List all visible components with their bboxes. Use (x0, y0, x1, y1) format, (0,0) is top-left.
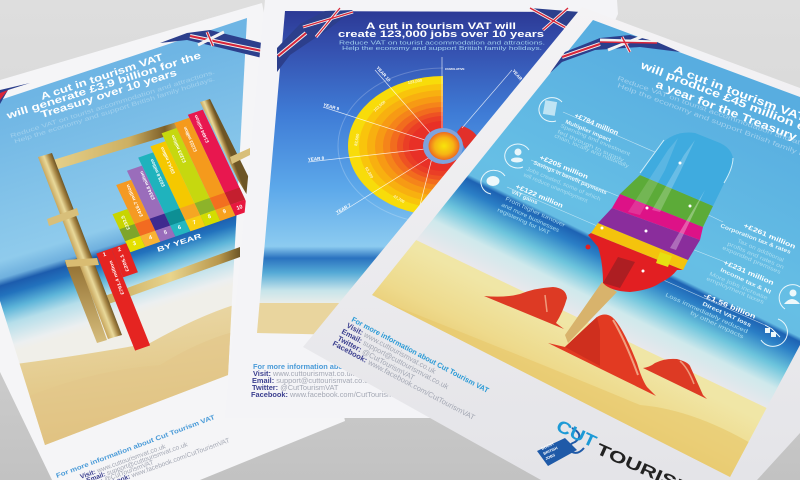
left statistics: and more businesses (500, 202, 560, 234)
middle leaflet title (338, 20, 546, 52)
bar chart: revenue by year: £1223 million (170, 134, 187, 164)
left statistics: Savings in benefit payments (532, 160, 607, 196)
left statistics: will reduce unemployment (521, 172, 589, 205)
wedge values: 47,700 (392, 194, 406, 204)
bar chart: revenue by year: 9 (222, 209, 227, 215)
right leaflet contact details: Visit: www.cuttourismvat.co.uk (345, 321, 438, 376)
bar chart: revenue by year: £232.5 (120, 214, 131, 231)
right leaflet contact details: Email: support@cuttourismvat.co.uk (340, 327, 451, 391)
bar chart: revenue by year: £1223 million (182, 126, 198, 153)
bar chart: revenue by year: 5 (163, 230, 168, 236)
bar chart: revenue by year (83, 110, 250, 351)
leader lines (507, 112, 765, 325)
left leaflet title: Help the economy and support British family holidays. (14, 76, 216, 145)
year labels: YEAR 1 (511, 68, 526, 84)
bar chart: revenue by year: 6 (177, 225, 182, 231)
bar chart: revenue by year: 10 (236, 204, 244, 212)
right statistics: expanded premises (721, 245, 782, 276)
left leaflet contact details: For more information about Cut Tourism VAT (55, 414, 216, 480)
middle leaflet contact details: Visit: www.cuttourismvat.co.uk (253, 369, 355, 378)
middle leaflet contact details: Email: support@cuttourismvat.co.uk (252, 376, 372, 385)
right leaflet contact details (331, 315, 491, 422)
wedge values (353, 77, 423, 204)
right statistics: More jobs increase (708, 271, 768, 302)
wedge values: 123,000 (407, 77, 423, 85)
bar chart: revenue by year: 3 (132, 241, 137, 247)
logo: Cut Tourism: JOBS (545, 453, 556, 461)
left leaflet title (4, 50, 216, 145)
year labels: YEAR 7 (335, 202, 352, 215)
left statistics: +£784 million (573, 112, 619, 137)
icon: piggy bank (481, 170, 505, 194)
right leaflet contact details: Facebook: www.facebook.com/CutTourismVAT (331, 339, 477, 422)
right statistics: Direct VAT loss (701, 301, 752, 329)
bar chart: revenue by year: £1404 million (193, 114, 210, 144)
middle leaflet title: Reduce VAT on tourist accommodation and attractions. (339, 40, 546, 46)
left leaflet contact details: Visit: www.cuttourismvat.co.uk (79, 443, 167, 480)
left statistics: Spending and investment (559, 123, 631, 158)
ice lolly melting (565, 132, 733, 343)
spokes (308, 57, 512, 215)
left leaflet title: Treasury over 10 years (40, 68, 179, 121)
logo: Cut Tourism: BRITISH (543, 446, 559, 456)
year labels: YEAR 9 (323, 102, 340, 112)
left leaflet beach picture (0, 18, 247, 445)
icon: person (779, 285, 800, 309)
left statistics: From higher turnover (504, 196, 566, 229)
left statistics: registering for VAT (496, 207, 551, 237)
right leaflet flag ribbon (550, 35, 680, 73)
middle leaflet contact details: Facebook: www.facebook.com/CutTourismVAT (251, 390, 407, 399)
left statistics (496, 112, 631, 237)
wedge values: 103,000 (372, 99, 387, 113)
right leaflet title: will produce £45 million each (638, 59, 800, 143)
bar chart: revenue by year: 2 (117, 247, 122, 253)
right statistics: Tax on additional (736, 238, 784, 264)
right leaflet contact details: For more information about Cut Tourism VAT (350, 315, 491, 395)
right statistics: Corporation tax & rates (719, 223, 791, 256)
right leaflet title: a year for the Treasury (654, 79, 799, 144)
left statistics: chain, locally and nationally (553, 133, 630, 170)
right leaflet title: Help the economy and support British family holidays. (616, 82, 800, 170)
middle leaflet title: A cut in tourism VAT will (366, 20, 516, 31)
left leaflet title: Reduce VAT on tourist accommodation and attractions. (10, 70, 216, 140)
panel: left leaflet, treasury revenue (0, 0, 345, 480)
middle leaflet title: Help the economy and support British family holidays. (342, 46, 543, 52)
right leaflet beach picture (360, 0, 800, 480)
bar chart: revenue by year: £761.4 million (108, 260, 125, 295)
left leaflet title: will generate £3.9 billion for the (4, 50, 203, 122)
left statistics: VAT gains (510, 189, 538, 206)
middle leaflet contact details: Twitter: @CutTourismVAT (252, 383, 339, 392)
centre sun (423, 128, 463, 164)
radial chart: cumulative jobs (308, 57, 522, 220)
fan rings (348, 76, 456, 212)
bar chart: revenue by year: £914.1 million (159, 146, 176, 175)
year labels: YEAR 8 (308, 156, 325, 162)
bar chart: revenue by year: 8 (207, 214, 212, 220)
right statistics: by other impacts (689, 310, 745, 340)
wedge values: 82,500 (353, 132, 360, 146)
right leaflet title: Reduce VAT on tourist accommodation and attractions. (616, 75, 800, 159)
right statistics: +£261 million (742, 222, 797, 251)
right statistics (664, 222, 797, 340)
bar chart: revenue by year: 4 (148, 234, 154, 241)
bar chart: revenue by year: £534.8 million (139, 170, 156, 201)
lolly dots (600, 162, 692, 272)
icon: calculator (539, 98, 562, 122)
right statistics: Income tax & NI (719, 267, 772, 296)
right statistics: +£231 million (722, 259, 775, 287)
right leaflet title: A cut in tourism VAT (672, 64, 800, 124)
bar chart: revenue by year: 7 (192, 220, 197, 226)
logo: Cut Tourism: CUT (553, 416, 600, 452)
right statistics: employment taxes (705, 276, 765, 306)
left leaflet flag ribbon (0, 30, 262, 104)
logo: Cut Tourism (537, 416, 696, 480)
year 1 wedge (457, 126, 477, 149)
right leaflet title (616, 59, 800, 170)
bar chart: revenue by year: £628.8 million (149, 158, 166, 188)
bar chart: revenue by year: £205.1 (119, 253, 130, 272)
year labels: YEAR 10 (375, 65, 392, 83)
melted puddle mounds (484, 287, 707, 399)
middle leaflet contact details (251, 362, 411, 399)
left statistics: Jobs created, some of which (525, 166, 601, 203)
middle leaflet flag ribbons (277, 8, 580, 72)
wedge values: 63,300 (364, 166, 375, 180)
left statistics: fed through to supply (556, 129, 625, 164)
deckchair frame (38, 99, 250, 343)
panel: middle leaflet, jobs created (225, 0, 618, 418)
left statistics: Multiplier impact (564, 119, 612, 144)
middle leaflet title: create 123,000 jobs over 10 years (338, 28, 544, 39)
logo: Cut Tourism: BOOST (541, 441, 555, 451)
middle leaflet contact details: For more information about Cut Tourism VAT (253, 362, 411, 371)
right statistics: profits and rates on (726, 241, 785, 271)
right leaflet contact details: Twitter: @CutTourismVAT (336, 334, 417, 382)
left leaflet title: A cut in tourism VAT (39, 52, 164, 103)
bar chart: revenue by year: £416.7 million (125, 183, 144, 218)
by year caption: BY YEAR (156, 233, 202, 254)
right statistics: Loss immediately reduced (664, 292, 749, 335)
panel: right leaflet, ice lolly revenue (303, 0, 800, 480)
left leaflet contact details (55, 414, 231, 480)
middle leaflet beach picture (257, 11, 564, 334)
left statistics: +£205 million (538, 154, 589, 181)
left statistics: +£122 million (514, 183, 564, 210)
icon: hands and coins (505, 144, 529, 168)
icon: falling graph (761, 319, 787, 346)
year labels: CUMULATIVE (445, 67, 464, 71)
year labels (308, 65, 526, 215)
bar chart: revenue by year: 1 (102, 252, 107, 258)
right statistics: -£1.56 billion (702, 292, 757, 321)
